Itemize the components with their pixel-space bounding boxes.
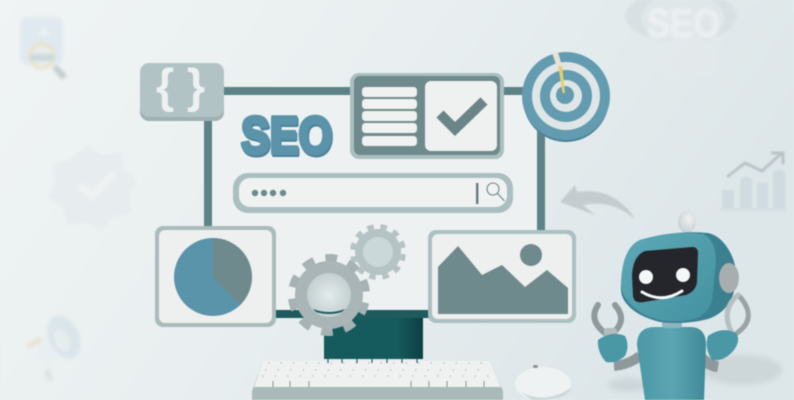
- icon: small gear: [351, 225, 405, 279]
- arrow: curved pointing left: [560, 185, 636, 220]
- right claw: [737, 297, 748, 333]
- faint SEO lettering: SEO: [647, 2, 720, 46]
- robot right hand: [707, 295, 748, 360]
- heading: SEO: SEO: [241, 107, 332, 165]
- monitor: [204, 87, 545, 359]
- icon: mouse: [515, 365, 571, 400]
- heading: SEO: SEO: [242, 109, 333, 167]
- icon: target with dart: [522, 52, 610, 142]
- robot eyes: [639, 268, 690, 284]
- robot smile: [642, 291, 682, 298]
- curly braces: }: [187, 59, 205, 112]
- robot right arm: [692, 340, 718, 367]
- panel: checklist card: [350, 73, 504, 159]
- robot: [594, 211, 782, 400]
- monitor stand: [324, 318, 423, 359]
- icon: large gear: [285, 251, 373, 339]
- left claw: [594, 305, 621, 333]
- icon: magnifier: [487, 183, 504, 201]
- cursor: [476, 183, 478, 204]
- check box: [425, 81, 497, 151]
- monitor screen: [212, 95, 537, 310]
- curly braces: {: [156, 59, 174, 112]
- robot head: [621, 232, 736, 323]
- robot left hand: [594, 305, 628, 362]
- search bar: [233, 173, 513, 213]
- search dots: [252, 190, 286, 196]
- panel: pie chart card: [155, 226, 276, 327]
- mountains: [438, 246, 568, 314]
- icon: faint magnifier tile: [20, 17, 67, 80]
- panel: image card: [428, 230, 576, 323]
- monitor frame: [204, 87, 545, 318]
- robot shadow: [608, 355, 782, 392]
- key gaps: [262, 363, 492, 376]
- sun: [520, 244, 542, 266]
- robot ear: [719, 263, 739, 293]
- checklist rows: [362, 87, 417, 146]
- icon: faint megaphone: [26, 310, 87, 383]
- icon: faint SEO cloud: [625, 0, 737, 78]
- keyboard: [252, 359, 503, 400]
- icon: faint check badge: [48, 145, 137, 231]
- icon: code braces tile: [140, 59, 224, 121]
- robot antenna ball: [678, 211, 696, 233]
- robot neck: [662, 319, 682, 328]
- icon: faint growth chart: [720, 153, 787, 211]
- check mark: [440, 101, 484, 129]
- pie chart: [174, 238, 252, 316]
- robot left arm: [614, 356, 640, 366]
- dart: [552, 52, 565, 93]
- robot screen: [632, 247, 698, 302]
- monitor lower bezel: [204, 310, 545, 318]
- robot body: [637, 327, 706, 400]
- curly braces: [156, 59, 205, 112]
